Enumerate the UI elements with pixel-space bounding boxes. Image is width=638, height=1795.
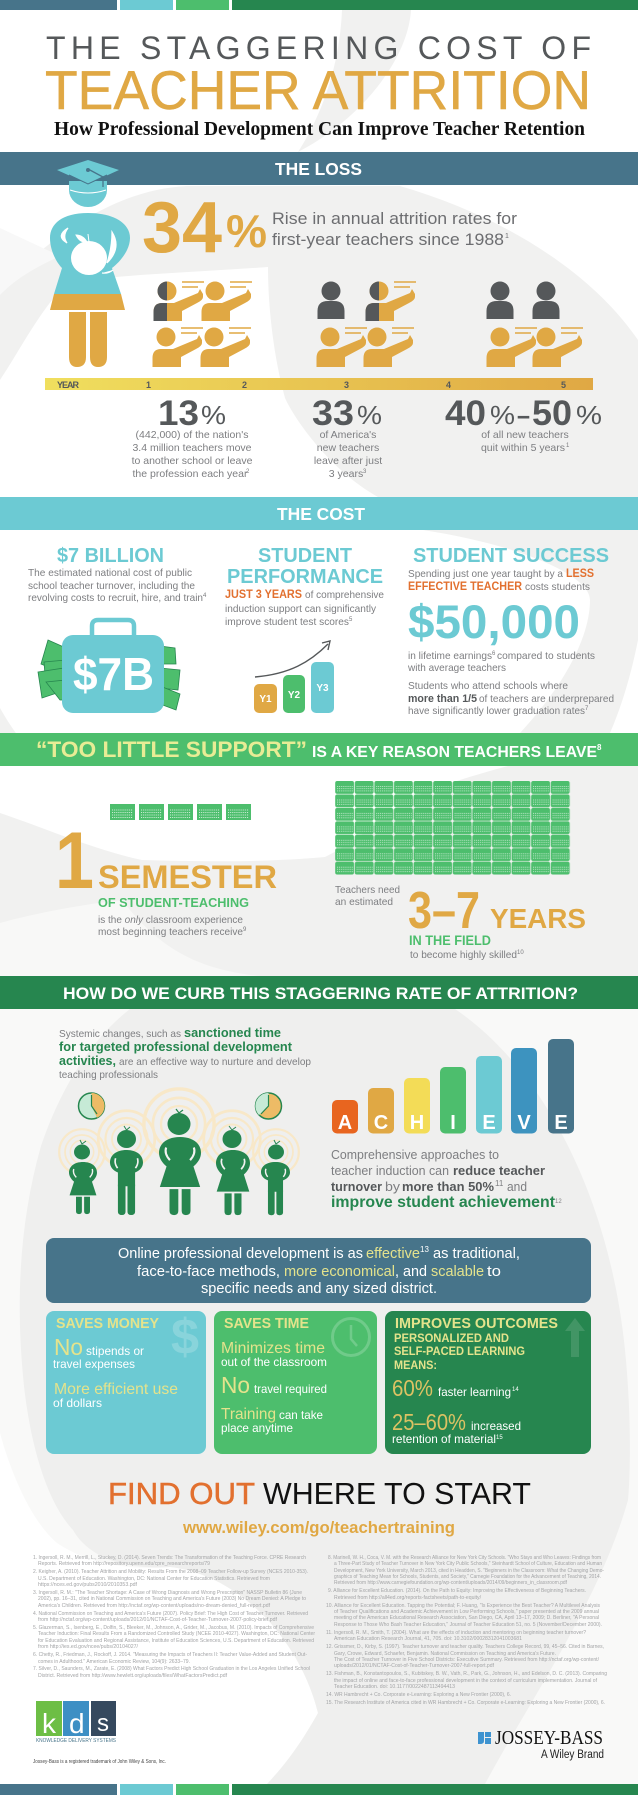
stat: 1 semester: 1 bbox=[55, 816, 94, 906]
illustration: learners with apple heads and rings bbox=[59, 1089, 299, 1215]
timeline bar: years bbox=[45, 378, 593, 390]
text: comprehensive approaches: more than 50% bbox=[402, 1179, 494, 1194]
stat: 33%: 33 bbox=[312, 394, 354, 433]
panel: saves money: stipends or bbox=[86, 1344, 144, 1358]
chart: ACHIEVE rising bars: C bbox=[374, 1112, 388, 1134]
panel: saves time: travel required bbox=[254, 1382, 327, 1396]
title: How Professional Development Can Improve Teacher Retention bbox=[54, 119, 585, 140]
references: right column: American Education Research Journal, 41, 705. doi: 10.3102/00028312041003681 bbox=[334, 1636, 522, 1642]
call to action: find out where to start bbox=[108, 1476, 531, 1537]
callout: online professional development bbox=[46, 1238, 591, 1303]
chart: ACHIEVE rising bars: E bbox=[554, 1112, 568, 1134]
logo: kds: KNOWLEDGE DELIVERY SYSTEMS bbox=[36, 1738, 116, 1744]
stat: 40%-50%: of all new teachers bbox=[481, 429, 569, 441]
logo: kds: d bbox=[69, 1708, 85, 1739]
references: right column: graphics of Teaching Mean for Schools, Students, and Society," Carnegie Foundation for the Advancement of Teaching, 2014. bbox=[334, 1574, 601, 1580]
stat: 1 semester bbox=[55, 816, 277, 938]
callout: online professional development: to bbox=[487, 1263, 501, 1280]
panel: improves outcomes: increased bbox=[471, 1419, 521, 1433]
title bbox=[45, 30, 591, 140]
stat: 3-7 years: YEARS bbox=[490, 903, 586, 934]
references: left column: 3. Ingersoll, R. M.: "The Teacher Shortage: A Case of Wrong Diagnosis and Wrong Prescription" NASSP Bulletin 86 (June bbox=[33, 1590, 302, 1596]
icon: calendars 3-7 years bbox=[335, 781, 570, 875]
panel: improves outcomes: 15 bbox=[496, 1435, 503, 1441]
stat: 3-7 years: 3–7 bbox=[408, 882, 480, 940]
icon: briefcase with money: $7B bbox=[73, 648, 154, 700]
logo: Jossey-Bass: A Wiley Brand bbox=[541, 1749, 604, 1761]
stat: 13%: the profession each year bbox=[132, 468, 248, 480]
panel: saves money: of dollars bbox=[53, 1396, 102, 1410]
band: how do we curb: HOW DO WE CURB THIS STAGGERING RATE OF ATTRITION? bbox=[63, 984, 578, 1003]
band: too little support: IS A KEY REASON TEACHERS LEAVE bbox=[312, 744, 597, 761]
column: student success: with average teachers bbox=[407, 662, 506, 674]
column: student performance bbox=[225, 545, 384, 628]
references: left column bbox=[33, 1555, 315, 1679]
column: $7 billion: school teacher turnover, including the bbox=[28, 580, 195, 592]
panel: saves time: Training bbox=[221, 1406, 276, 1423]
chart: rising student scores Y1-Y3: Y3 bbox=[316, 683, 329, 694]
text: systemic changes bbox=[59, 1025, 311, 1081]
column: student performance: improve student test scores bbox=[225, 616, 349, 628]
callout: online professional development: more economical bbox=[284, 1263, 395, 1280]
text: comprehensive approaches: Comprehensive approaches to bbox=[331, 1147, 499, 1162]
column: student success: 7 bbox=[585, 706, 589, 712]
column: student success: costs students bbox=[525, 581, 590, 593]
column: student success: of teachers are underprepared bbox=[479, 693, 614, 705]
column: student success: STUDENT SUCCESS bbox=[413, 544, 609, 567]
band: the loss bbox=[0, 152, 638, 185]
references: right column: Retrieved from http://www.carnegiefoundation.org/wp-content/uploads/2014/09/beginners_in_classroom.pdf bbox=[334, 1580, 568, 1586]
icon: calendar one semester bbox=[110, 804, 251, 820]
column: $7 billion: 4 bbox=[203, 593, 207, 599]
text: comprehensive approaches: improve student achievement bbox=[331, 1194, 555, 1211]
text: comprehensive approaches: reduce teacher bbox=[453, 1163, 545, 1178]
references: right column: 12. Grissmer, D., Kirby, S. (1997). Teacher turnover and teacher quality. Teachers College Record, 99, 45–56. Cited in Barnes, bbox=[326, 1644, 604, 1650]
stat: 33%: new teachers bbox=[317, 442, 379, 454]
panel: improves outcomes bbox=[385, 1311, 591, 1454]
panel: improves outcomes: 14 bbox=[512, 1387, 519, 1393]
band: how do we curb bbox=[0, 976, 638, 1009]
panel: saves money: SAVES MONEY bbox=[56, 1316, 159, 1332]
bottom colour bar bbox=[0, 1784, 638, 1795]
icon: clock watermark bbox=[332, 1318, 370, 1356]
references: right column: 14. WR Hambrecht + Co. Corporate e-Learning: Exploring a New Frontier (2000), 6. bbox=[326, 1692, 511, 1698]
panel: saves time: out of the classroom bbox=[221, 1355, 327, 1369]
references: left column: District. Retrieved from http://www.hewlett.org/uploads/files/WhatFactorsPredict.pdf bbox=[38, 1673, 228, 1679]
stat: 13%: (442,000) of the nation's bbox=[136, 429, 248, 441]
references: right column: 15. The Research Institute of America cited in WR Hambrecht + Co. Corporate e-Learning: Exploring a New Frontier (2000), 6. bbox=[326, 1700, 605, 1706]
text: systemic changes: activities, bbox=[59, 1053, 116, 1068]
stat: 40%-50%: 1 bbox=[566, 443, 570, 449]
column: $7 billion bbox=[28, 544, 207, 604]
text: comprehensive approaches: 12 bbox=[555, 1199, 562, 1205]
stat: 3-7 years: 10 bbox=[517, 950, 524, 956]
stat: 13%: to another school or leave bbox=[132, 455, 253, 467]
stat: 3-7 years: IN THE FIELD bbox=[409, 933, 491, 948]
callout: online professional development: , and bbox=[395, 1263, 427, 1280]
references: left column: Teacher Induction: Final Results From a Randomized Controlled Study (NCEE 2010-4027). Washington, DC: National Center bbox=[38, 1631, 315, 1637]
references: right column: 13. Fishman, B., Konstantopoulos, S., Kubitskey, B. W., Vath, R., Park, G., Johnson, H., and Edelson, D. C. (2013). Comparing bbox=[326, 1671, 607, 1677]
callout: online professional development: scalable bbox=[431, 1263, 484, 1280]
column: $7 billion: $7 BILLION bbox=[57, 544, 164, 567]
panel: saves time bbox=[214, 1311, 377, 1454]
column: $7 billion: revolving costs to recruit, hire, and train bbox=[28, 592, 203, 604]
panel: improves outcomes: faster learning bbox=[438, 1385, 511, 1399]
stat: 40%-50%: 40 bbox=[445, 394, 486, 433]
panel: improves outcomes: MEANS: bbox=[394, 1360, 437, 1372]
panel: saves time: Minimizes time bbox=[221, 1340, 325, 1357]
references: left column: U.S. Department of Education. Washington, DC: National Center for Education Statistics. Retrieved from bbox=[38, 1576, 270, 1582]
stat: 34% rise: 34 bbox=[142, 188, 222, 268]
title: TEACHER ATTRITION bbox=[45, 60, 591, 121]
references: right column: Teacher Education. doi: 10.1177/0022487113494413 bbox=[334, 1684, 455, 1690]
band: too little support: 8 bbox=[597, 743, 602, 752]
band: too little support bbox=[0, 733, 638, 766]
chart: ACHIEVE rising bars bbox=[332, 1039, 574, 1134]
stat: 1 semester: 9 bbox=[243, 927, 247, 933]
panel: saves money: travel expenses bbox=[53, 1357, 135, 1371]
text: comprehensive approaches: by bbox=[385, 1179, 401, 1194]
stat: 33%: of America's bbox=[320, 429, 376, 441]
references: left column: 1. Ingersoll, R. M., Merrill, L., Stuckey, D. (2014). Seven Trends: The Transformation of the Teaching Force. CPRE Research bbox=[33, 1555, 306, 1561]
references: left column: comes in Adulthood." American Economic Review, 104(9): 2633–79. bbox=[38, 1659, 190, 1665]
references: right column: a Three-Part Study of Teacher Turnover in New York City Public Schools," Steinhardt School of Culture, Education and Human bbox=[334, 1561, 602, 1567]
references: right column: Gary, Crowe, Edward, Schaefer, Benjamin. National Commission on Teaching and America's Future. bbox=[334, 1651, 556, 1657]
callout: online professional development: as traditional, bbox=[433, 1245, 520, 1262]
references: left column: 2. Keigher, A. (2010). Teacher Attrition and Mobility: Results From the 2008–09 Teacher Follow-up Survey (NCES 2010-353). bbox=[33, 1569, 308, 1575]
panel: improves outcomes: 25–60% bbox=[392, 1409, 466, 1435]
panel: saves money bbox=[46, 1309, 206, 1454]
references: right column: Response to Those Who Bash Teacher Education," Journal of Teacher Education 51, no. 5 (November/December 2000). bbox=[334, 1622, 602, 1628]
callout: online professional development: effective bbox=[366, 1245, 420, 1262]
references: left column: 7. Silver, D., Saunders, M., Zarate, E. (2008) What Factors Predict High School Graduation in the Los Angeles Unified School bbox=[33, 1666, 310, 1672]
references: left column: for Education Evaluation and Regional Assistance, Institute of Education Sciences, U.S. Department of Education. Retrieved bbox=[38, 1638, 314, 1644]
panel: improves outcomes: 60% bbox=[392, 1375, 433, 1401]
stat: 13%: % bbox=[201, 400, 226, 430]
logo: kds: k bbox=[42, 1708, 57, 1739]
text: comprehensive approaches: and bbox=[507, 1179, 527, 1194]
stat: 40%-50%: % bbox=[490, 400, 515, 430]
stat: 1 semester: SEMESTER bbox=[98, 859, 277, 895]
references: left column: from http://ies.ed.gov/ncee/pubs/20104027/ bbox=[38, 1644, 139, 1650]
band: the cost: THE COST bbox=[277, 504, 365, 524]
stat: 3-7 years: an estimated bbox=[335, 896, 393, 908]
column: student success: in lifetime earnings bbox=[408, 650, 492, 662]
column: $7 billion: The estimated national cost of public bbox=[28, 567, 192, 579]
stat: 13%: 2 bbox=[246, 469, 250, 475]
panel: saves money: More efficient use bbox=[54, 1381, 178, 1398]
call to action: find out where to start: WHERE TO START bbox=[263, 1476, 531, 1511]
references: left column: 5. Glazerman, S., Isenberg, E., Dolfin, S., Bleeker, M., Johnson, A., Grider, M., Jacobus, M. (2010). Impacts of Comprehensive bbox=[33, 1625, 314, 1631]
references: left column: 4. National Commission on Teaching and America's Future (2007). Policy Brief: The High Cost of Teacher Turnover. Retrieved bbox=[33, 1611, 308, 1617]
column: student success bbox=[407, 544, 614, 717]
references: right column: 10. Alliance for Excellent Education. Tapping the Potential; F. Huang, "Is Experience the Best Teacher? A Multilevel Analysis bbox=[326, 1603, 600, 1609]
stat: 3-7 years bbox=[335, 882, 586, 961]
text: systemic changes: for targeted professional development bbox=[59, 1039, 293, 1054]
stat: 40%-50%: % bbox=[576, 400, 602, 430]
stat: 1 semester: OF STUDENT-TEACHING bbox=[98, 895, 249, 910]
stat: 1 semester: most beginning teachers receive bbox=[98, 926, 243, 938]
stat: 3-7 years: to become highly skilled bbox=[410, 949, 517, 961]
references: left column: 2002), pp. 16–31, cited in National Commission on Teaching and America's Future (2003) No Dream Denied: A Pledge to bbox=[38, 1596, 306, 1602]
callout: online professional development: specific needs and any sized district. bbox=[201, 1280, 437, 1297]
stat: 34% rise bbox=[142, 188, 517, 268]
stat: 34% rise: first-year teachers since 1988 bbox=[272, 230, 504, 249]
call to action: find out where to start: www.wiley.com/go/teachertraining bbox=[182, 1519, 455, 1537]
stat: 3-7 years: Teachers need bbox=[335, 884, 400, 896]
timeline bar: years: 4 bbox=[446, 380, 451, 390]
column: student performance: 5 bbox=[349, 617, 353, 623]
timeline bar: years: 5 bbox=[561, 380, 566, 390]
panel: improves outcomes: IMPROVES OUTCOMES bbox=[395, 1316, 558, 1332]
references: left column: from http://nctaf.org/wp-content/uploads/2012/01/NCTAF-Cost-of-Teacher-Turnover-2007-policy-brief.pdf bbox=[38, 1617, 278, 1623]
chart: ACHIEVE rising bars: H bbox=[410, 1112, 424, 1134]
column: student success: LESS bbox=[566, 568, 594, 580]
chart: ACHIEVE rising bars: E bbox=[482, 1112, 496, 1134]
column: student success: compared to students bbox=[497, 650, 595, 662]
references: right column: Development, New York University, March 2013, cited in Headden, S. "Beginners in the Classroom: What the Changing Demo- bbox=[334, 1568, 604, 1574]
text: systemic changes: sanctioned time bbox=[184, 1025, 281, 1040]
chart: rising student scores Y1-Y3 bbox=[254, 641, 334, 713]
column: student performance: STUDENT bbox=[258, 545, 352, 567]
text: systemic changes: are an effective way to nurture and develop bbox=[119, 1056, 311, 1068]
references: left column: 6. Chetty, R., Friedman, J., Rockoff, J. 2014. "Measuring the Impacts of Teachers II: Teacher Value-Added and Student Out- bbox=[33, 1652, 307, 1658]
pictogram: teachers leaving by year bbox=[152, 282, 583, 367]
timeline bar: years: 3 bbox=[344, 380, 349, 390]
column: student performance: PERFORMANCE bbox=[227, 566, 383, 588]
panel: saves time: can take bbox=[279, 1408, 323, 1422]
chart: rising student scores Y1-Y3: Y1 bbox=[259, 694, 272, 705]
stat: 34% rise: Rise in annual attrition rates for bbox=[272, 209, 517, 228]
references: right column: of Teacher Qualifications and Academic Achievement in Low Performing Schools," paper presented at the 2009 annual bbox=[334, 1609, 599, 1615]
panel: saves time: SAVES TIME bbox=[224, 1316, 309, 1332]
panel: saves time: No bbox=[221, 1372, 250, 1398]
icon: up arrow watermark bbox=[565, 1318, 585, 1357]
references: right column: 11. Ingersoll, R. M., Smith, T. (2004). What are the effects of induction and mentoring on beginning teacher turnover? bbox=[326, 1630, 586, 1636]
stat: 13%: 3.4 million teachers move bbox=[132, 442, 252, 454]
band: too little support: “TOO LITTLE SUPPORT” bbox=[36, 737, 307, 762]
column: student performance: JUST 3 YEARS bbox=[225, 589, 302, 601]
icon: dollar watermark: $ bbox=[171, 1309, 199, 1365]
panel: improves outcomes: retention of material bbox=[392, 1432, 496, 1446]
stat: 40%-50%: quit within 5 years bbox=[481, 442, 565, 454]
band: the cost bbox=[0, 497, 638, 530]
column: student success: Students who attend schools where bbox=[408, 680, 568, 692]
text: systemic changes: Systemic changes, such as bbox=[59, 1028, 181, 1040]
column: student success: have significantly lower graduation rates bbox=[408, 705, 585, 717]
column: student success: EFFECTIVE TEACHER bbox=[408, 581, 523, 593]
logo: Jossey-Bass bbox=[478, 1727, 604, 1761]
text: comprehensive approaches bbox=[331, 1147, 562, 1211]
chart: ACHIEVE rising bars: A bbox=[338, 1112, 352, 1134]
text: comprehensive approaches: 11 bbox=[495, 1179, 504, 1188]
stat: 34% rise: % bbox=[226, 205, 267, 257]
logo: kds bbox=[36, 1701, 116, 1744]
stat: 40%-50%: – bbox=[517, 400, 530, 430]
stat: 34% rise: 1 bbox=[505, 233, 509, 240]
title: THE STAGGERING COST OF bbox=[46, 30, 591, 66]
references: right column: Retrieved from http://all4ed.org/reports-factsheets/path-to-equity/ bbox=[334, 1595, 482, 1601]
logo: kds: s bbox=[97, 1710, 109, 1737]
band: the loss: THE LOSS bbox=[275, 159, 362, 179]
text: comprehensive approaches: teacher induction can bbox=[331, 1163, 449, 1178]
references: left column: Reports. Retrieved from http://repository.upenn.edu/cpre_researchreports/79 bbox=[38, 1561, 210, 1567]
panel: improves outcomes: SELF-PACED LEARNING bbox=[394, 1346, 525, 1358]
icon: clocks bbox=[78, 1093, 282, 1119]
references: right column: the impact of online and face-to-face professional development in the context of curriculum implementation. Journal of bbox=[334, 1678, 598, 1684]
text: comprehensive approaches: turnover bbox=[331, 1179, 382, 1194]
references: left column: America's Children. Retrieved from http://nctaf.org/wp-content/uploads/no-dream-denied_full-report.pdf bbox=[38, 1603, 271, 1609]
trademark note: Jossey-Bass is a registered trademark of John Wiley & Sons, Inc. bbox=[33, 1759, 166, 1765]
column: student success: $50,000 bbox=[408, 596, 580, 649]
call to action: find out where to start: FIND OUT bbox=[108, 1476, 255, 1511]
stat: 13%: 13 bbox=[158, 394, 199, 433]
timeline bar: years: YEAR bbox=[57, 380, 80, 390]
column: student success: 6 bbox=[492, 651, 496, 657]
top colour bar bbox=[0, 0, 638, 10]
timeline bar: years: 1 bbox=[146, 380, 151, 390]
references: right column: The Cost of Teacher Turnover in Five School Districts: Executive Summary. Retrieved from http://nctaf.org/wp-content/ bbox=[334, 1657, 600, 1663]
stat: 33%: 3 years bbox=[329, 468, 363, 480]
stat: 40%-50% bbox=[445, 394, 602, 454]
references: right column: uploads/2012/01/NCTAF-Cost-of-Teacher-Turnover-2007-full-report.pdf bbox=[334, 1663, 495, 1669]
text: systemic changes: teaching professionals bbox=[59, 1069, 158, 1081]
references: right column: meeting of the American Educational Research Association, San Diego, CA, April 13–17, 2009; D. Berliner, "A Personal bbox=[334, 1615, 599, 1621]
logo: Jossey-Bass: JOSSEY-BASS bbox=[495, 1727, 603, 1749]
callout: online professional development: 13 bbox=[420, 1245, 429, 1254]
column: student performance: induction support can significantly bbox=[225, 603, 377, 615]
references: left column: https://nces.ed.gov/pubs2010/2010353.pdf bbox=[38, 1582, 138, 1588]
panel: saves time: place anytime bbox=[221, 1421, 293, 1435]
references: right column bbox=[326, 1555, 607, 1706]
column: student success: more than 1/5 bbox=[408, 693, 477, 705]
stat: 33%: % bbox=[357, 400, 382, 430]
column: student performance: of comprehensive bbox=[305, 589, 384, 601]
timeline bar: years: 2 bbox=[242, 380, 247, 390]
stat: 33%: leave after just bbox=[314, 455, 382, 467]
callout: online professional development: face-to-face methods, bbox=[137, 1263, 280, 1280]
stat: 40%-50%: 50 bbox=[532, 394, 572, 433]
panel: saves money: No bbox=[54, 1334, 83, 1360]
stat: 1 semester: is the only classroom experience bbox=[98, 914, 243, 926]
icon: teacher with graduation cap and apple bbox=[50, 160, 130, 367]
chart: ACHIEVE rising bars: I bbox=[450, 1112, 456, 1134]
references: right column: 9. Alliance for Excellent Education. (2014). On the Path to Equity: Improving the Effectiveness of Beginning Teachers. bbox=[328, 1588, 586, 1594]
callout: online professional development: Online professional development is as bbox=[118, 1245, 363, 1262]
chart: rising student scores Y1-Y3: Y2 bbox=[288, 690, 301, 701]
stat: 33% bbox=[312, 394, 382, 480]
column: student success: Spending just one year taught by a bbox=[408, 568, 563, 580]
icon: briefcase with money bbox=[38, 620, 180, 713]
chart: ACHIEVE rising bars: V bbox=[517, 1112, 531, 1134]
stat: 13% bbox=[132, 394, 253, 480]
stat: 33%: 3 bbox=[363, 469, 367, 475]
panel: improves outcomes: PERSONALIZED AND bbox=[394, 1333, 509, 1345]
references: right column: 8. Marinell, W. H., Coca, V. M. with the Research Alliance for New York City Schools. "Who Stays and Who Leaves: Findings from bbox=[328, 1555, 601, 1561]
